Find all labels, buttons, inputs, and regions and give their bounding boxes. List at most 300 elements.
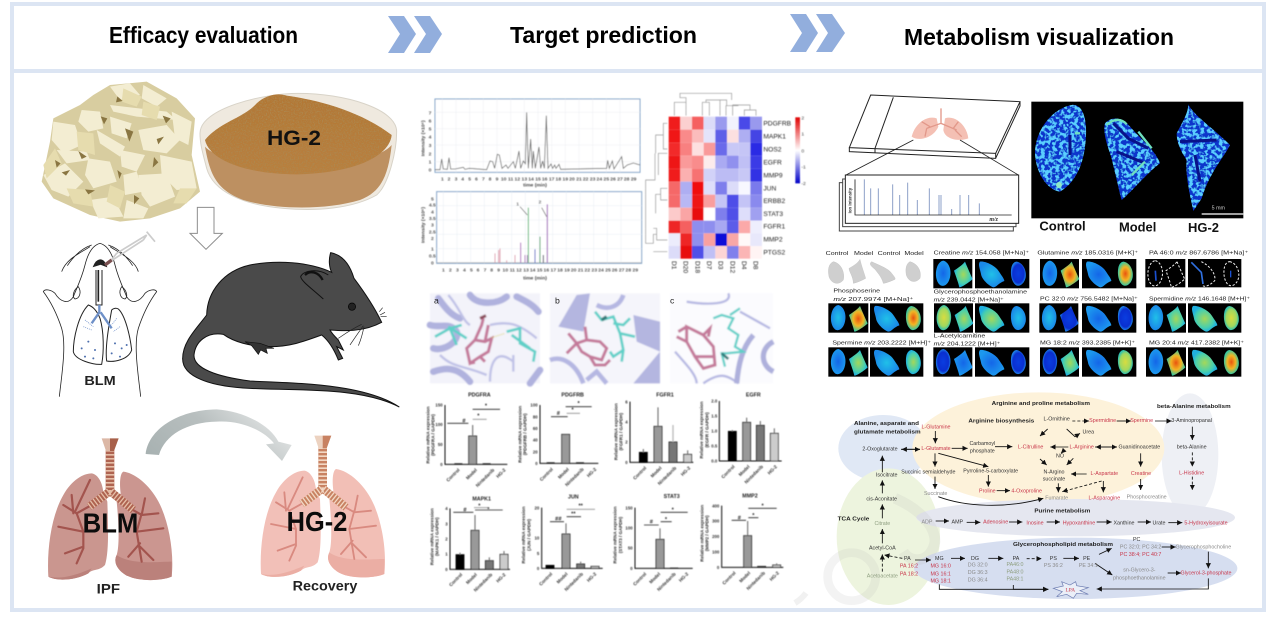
icon: fibrotic lungs (48, 438, 172, 580)
chart: total ion chromatogram: 2 (448, 176, 451, 182)
chart: FGFR1: HG-2 (680, 465, 692, 477)
chart: extracted ion chromatogram: 2 (449, 268, 452, 274)
chart: PDGFRB: (PDGFRB / GAPDH) (523, 413, 528, 455)
metabolites: arginine and proline: L-Arginine (1070, 445, 1094, 451)
chart: extracted ion chromatogram: 13 (523, 268, 529, 274)
chart: PDGFRA: 0 (440, 462, 443, 467)
chart: extracted ion chromatogram: 14 (530, 268, 536, 274)
image: ion images of lung sections: 5 mm (1212, 206, 1226, 212)
chart: FGFR1: 6 (625, 399, 628, 404)
heading: Metabolism visualization: Metabolism visualization (904, 24, 1174, 50)
chart: gene heatmap (646, 93, 806, 274)
metabolites: TCA and purine: Acetoacetate (867, 573, 898, 579)
heatmap gene labels: NOS2 (763, 146, 782, 153)
chart: EGFR (699, 392, 782, 485)
metabolites: TCA and purine: Urate (1152, 520, 1166, 526)
arrow: chevrons 2 (790, 14, 845, 52)
chart: MMP2: # (738, 516, 742, 522)
chart: FGFR1: 0 (625, 460, 628, 465)
chart: extracted ion chromatogram: 9 (497, 268, 500, 274)
callout: LPA starburst (1053, 582, 1088, 598)
chart: PDGFRA: # (462, 418, 466, 424)
docking c (670, 293, 773, 383)
chart: extracted ion chromatogram: 19 (564, 268, 570, 274)
chart: STAT3: (STAT3 / GAPDH) (618, 516, 623, 553)
chart: MAPK1: # (463, 508, 467, 514)
metabolites: arginine and proline: L-Glutamine (921, 424, 951, 430)
chart: extracted ion chromatogram: 20 (571, 268, 577, 274)
metabolites: glycerophospholipid: DG (971, 556, 979, 562)
chart: extracted ion chromatogram: 27 (619, 268, 625, 274)
metabolites: glycerophospholipid: Glycerol-3-phosphate (1181, 570, 1231, 576)
heatmap gene labels: FGFR1 (763, 224, 785, 231)
metabolites: arginine and proline: Phosphocreatine (1127, 495, 1167, 501)
metabolites: arginine and proline (862, 417, 1212, 501)
heading: TCA Cycle: TCA Cycle (838, 517, 869, 523)
chart: total ion chromatogram: Intensity (×10⁶) (420, 120, 426, 156)
optical tissue sections: Control (826, 251, 848, 257)
chart: FGFR1: Nintedanib (657, 465, 677, 486)
pathway zones (837, 392, 1237, 605)
chart: extracted ion chromatogram: 4 (431, 209, 434, 215)
chart: total ion chromatogram: 12 (515, 176, 520, 182)
heatmap gene labels: EGFR (763, 159, 782, 166)
chart: MMP2: MMP2 (742, 493, 758, 499)
chart: extracted ion chromatogram: 11 (510, 268, 515, 274)
chart: total ion chromatogram: 0 (429, 168, 432, 174)
ion image: Phosphoserine: m/z 207.9974 [M+Na]⁺ (833, 297, 914, 303)
watermark (795, 593, 806, 603)
metabolites: arginine and proline: 4-Oxoproline (1011, 488, 1042, 494)
chart: EGFR: Nintedanib (743, 464, 764, 485)
metabolites: glycerophospholipid: PA 18:2 (900, 571, 918, 577)
chart: extracted ion chromatogram: 0.5 (429, 254, 436, 260)
metabolites: glycerophospholipid: phosphoethanolamine (1113, 575, 1166, 581)
chart: PDGFRB: Relative mRNA expression (517, 406, 522, 463)
chart: total ion chromatogram: 20 (569, 176, 575, 182)
chart: extracted ion chromatogram: 24 (598, 268, 604, 274)
chart: extracted ion chromatogram: 12 (516, 268, 522, 274)
chart: STAT3: * (665, 517, 668, 523)
heatmap colour bar (795, 116, 806, 187)
chart: MAPK1: MAPK1 (472, 496, 491, 502)
chart: MAPK1: HG-2 (495, 572, 507, 584)
chart: total ion chromatogram: 14 (528, 176, 534, 182)
metabolites: glycerophospholipid: PE 34:1 (1079, 563, 1098, 569)
chart: STAT3: 100 (625, 525, 633, 530)
panel: qPCR bar charts (425, 392, 783, 593)
label: a: a (434, 296, 439, 306)
metabolites: glycerophospholipid: PA48:1 (1006, 577, 1024, 583)
chart: extracted ion chromatogram: 6 (477, 268, 480, 274)
chart: JUN: ** (571, 512, 576, 518)
chart: PDGFRA: Model (465, 468, 478, 481)
chart: MAPK1: (MAPK1 / GAPDH) (435, 517, 440, 556)
chart: MMP2: * (762, 504, 765, 510)
chart: STAT3: 50 (628, 546, 633, 551)
metabolites: arginine and proline: NO (1056, 454, 1064, 460)
heading: Alanine, asparate and glutamate metabolism: glutamate metabolism (854, 430, 921, 436)
chart: EGFR: Model (738, 464, 751, 477)
chart: JUN: (JUN / GAPDH) (526, 519, 531, 551)
chart: extracted ion chromatogram: 21 (578, 268, 584, 274)
metabolites: glycerophospholipid: MG (935, 556, 944, 562)
watermark rings (828, 498, 935, 601)
chart: extracted ion chromatogram: 3 (431, 223, 434, 229)
metabolites: glycerophospholipid: PA (1013, 556, 1020, 562)
metabolites: arginine and proline: Proline (979, 488, 996, 494)
panel: metabolic pathway map (828, 392, 1237, 605)
heading: Glycerophospholipid metabolism: Glycerophospholipid metabolism (1013, 542, 1113, 548)
metabolites: TCA and purine: Hypoxanthine (1063, 520, 1095, 526)
heatmap sample labels: D4 (740, 261, 747, 270)
icon: mouse anatomy with intratracheal instillation (43, 232, 157, 397)
optical tissue sections (826, 251, 924, 283)
heading: Arginine and proline metabolism: Arginine and proline metabolism (992, 401, 1090, 407)
chart: STAT3 (613, 494, 693, 592)
metabolites: arginine and proline: L-Asparagine (1088, 495, 1120, 501)
chart: PDGFRB: * (578, 401, 581, 407)
ion image: Spermine (828, 340, 931, 377)
chart: MAPK1: 3 (445, 521, 448, 526)
heatmap sample labels (670, 261, 759, 274)
docking b (550, 293, 660, 383)
chart: total ion chromatogram: 23 (590, 176, 596, 182)
optical tissue sections: Model (904, 251, 924, 257)
chart: extracted ion chromatogram: 28 (626, 268, 631, 274)
chart: JUN: JUN (568, 495, 579, 501)
chart: PDGFRA: 50 (438, 442, 443, 447)
chart: extracted ion chromatogram: 2.5 (429, 229, 436, 235)
chart: STAT3: STAT3 (664, 494, 680, 500)
heatmap colour bar: 2 (801, 116, 804, 122)
chart: total ion chromatogram (420, 99, 640, 188)
chart: extracted ion chromatogram: 0 (431, 261, 434, 267)
image: ion images of lung sections (1031, 102, 1243, 218)
chart: EGFR: HG-2 (767, 464, 778, 476)
chart: PDGFRA (425, 392, 507, 488)
chart: EGFR: 2.0 (711, 399, 718, 404)
metabolites: arginine and proline: 2-Oxoglutarate (862, 447, 898, 453)
metabolites: glycerophospholipid: PC (1133, 537, 1141, 543)
chart: FGFR1: Relative mRNA expression (613, 403, 618, 460)
chart: EGFR: 0.5 (711, 444, 718, 449)
chart: MAPK1: 4 (445, 506, 448, 511)
chart: MMP2: 200 (712, 534, 720, 539)
herb chips (42, 82, 200, 222)
metabolites: arginine and proline: phosphate (970, 449, 995, 455)
chart: MMP2: Model (738, 571, 751, 584)
chart: total ion chromatogram: 6 (429, 118, 432, 124)
chart: extracted ion chromatogram: 22 (585, 268, 590, 274)
chart: extracted ion chromatogram: 8 (490, 268, 493, 274)
chart: total ion chromatogram: 17 (549, 176, 555, 182)
metabolites: glycerophospholipid: MG 16:1 (930, 571, 951, 577)
chart: extracted ion chromatogram: time (min) (523, 276, 547, 282)
chart: PDGFRA: * (477, 414, 480, 420)
chart: total ion chromatogram: 9 (496, 176, 499, 182)
chart: STAT3: 150 (625, 505, 633, 510)
panel: MALDI imaging overview (839, 95, 1243, 235)
chart: STAT3: Model (648, 572, 661, 585)
chart: MMP2: Relative mRNA expression (699, 505, 704, 562)
icon: recovered lungs (261, 436, 385, 577)
ion image: Glycerophosphoethanolamine: m/z 239.0442 [M+Na]⁺ (934, 297, 1004, 303)
chart: total ion chromatogram: 8 (489, 176, 492, 182)
metabolites: arginine and proline: L-Ornithine (1043, 417, 1070, 423)
chart: STAT3: Relative mRNA expression (613, 506, 618, 563)
chart: PDGFRA: HG-2 (495, 467, 507, 479)
heatmap sample labels: D18 (693, 261, 700, 274)
chart: PDGFRA: PDGFRA (468, 392, 491, 398)
chart: STAT3: # (650, 520, 654, 526)
heatmap sample labels: D1 (670, 261, 677, 270)
chart: extracted ion chromatogram: 1 (516, 202, 519, 208)
chart: PDGFRB: Nintedanib (564, 467, 585, 487)
metabolites: glycerophospholipid: PS (1050, 556, 1057, 562)
metabolites: arginine and proline: L-Aspartate (1091, 471, 1118, 477)
chart: extracted ion chromatogram: 5 (431, 196, 434, 202)
chart: MAPK1: 1 (445, 552, 448, 557)
chart: PDGFRB (517, 392, 598, 487)
chart: MAPK1: Model (465, 572, 478, 585)
ion image: PA 46:0 (1145, 251, 1249, 287)
metabolites: glycerophospholipid: PA46:0 (1006, 562, 1024, 568)
heatmap gene labels: STAT3 (763, 211, 783, 218)
chart: total ion chromatogram: 3 (455, 176, 458, 182)
chart: extracted ion chromatogram: 2 (539, 200, 542, 206)
metabolites: arginine and proline: L-Glutamate (921, 446, 951, 452)
chart: MAPK1: Nintedanib (473, 572, 493, 593)
label: b: b (555, 296, 560, 306)
chart: MMP2: (MMP2 / GAPDH) (705, 515, 710, 551)
ion image: Phosphoserine (828, 288, 923, 333)
metabolites: glycerophospholipid: PS 36:2 (1044, 563, 1063, 569)
metabolites: arginine and proline: Isocitrate (876, 472, 898, 478)
heatmap gene labels: MMP2 (763, 237, 783, 244)
metabolites: TCA and purine: AMP (952, 520, 964, 526)
ion image: L-Acetylcarnitine: m/z 204.1222 [M+H]⁺ (934, 341, 1001, 347)
chart: extracted ion chromatogram: 4.5 (429, 203, 436, 209)
chart: extracted ion chromatogram: Intensity (×10⁶) (420, 207, 426, 243)
chart: PDGFRB: 80 (533, 414, 538, 419)
metabolites: arginine and proline: L-Histidine (1179, 470, 1204, 476)
metabolites: arginine and proline: Spermidine (1089, 418, 1116, 424)
metabolites: arginine and proline: Succinate (924, 491, 947, 497)
chart: total ion chromatogram: 7 (429, 110, 432, 116)
metabolites: glycerophospholipid: DG 32:0 (968, 562, 988, 568)
chart: MMP2: Nintedanib (745, 570, 766, 591)
chart: total ion chromatogram: 25 (604, 176, 609, 182)
ion image: Phosphoserine: Phosphoserine (833, 288, 880, 294)
metabolites: arginine and proline: beta-Alanine (1177, 445, 1207, 451)
chart: MMP2: 0 (717, 565, 720, 570)
chart: mass spectrum stack: m/z (989, 217, 999, 223)
chart: JUN: 10 (535, 536, 540, 541)
ion image: Creatine: Creatine m/z 154.058 [M+Na]⁺ (934, 251, 1029, 257)
chart: PDGFRA: * (485, 404, 488, 410)
chart: PDGFRB: Control (539, 467, 554, 482)
chart: total ion chromatogram: 3 (429, 143, 432, 149)
metabolites: TCA and purine (866, 497, 1228, 579)
arrow: chevrons 1 (388, 16, 442, 53)
metabolites: arginine and proline: L-Citrulline (1018, 445, 1043, 451)
heatmap colour bar: -2 (801, 181, 806, 187)
heatmap dendrograms (646, 93, 756, 252)
chart: PDGFRB: 60 (533, 426, 538, 431)
chart: extracted ion chromatogram: 23 (592, 268, 597, 274)
chart: EGFR: 0.0 (711, 459, 718, 464)
icon: black mouse (183, 253, 399, 407)
chart: total ion chromatogram: 27 (617, 176, 623, 182)
ion image: Spermidine: Spermidine m/z 146.1648 [M+H]⁺ (1149, 296, 1250, 302)
chart: PDGFRA: 150 (435, 403, 443, 408)
panel: efficacy evaluation top (42, 82, 399, 407)
chart: total ion chromatogram: 1 (441, 176, 444, 182)
chart: JUN: 0 (537, 566, 540, 571)
chart: STAT3: HG-2 (678, 571, 690, 583)
ion image: PC 32:0 (1039, 296, 1138, 333)
chart: PDGFRA: (PDGFRA / GAPDH) (431, 414, 436, 456)
metabolites: glycerophospholipid: DG 36:3 (968, 570, 988, 576)
chart: MAPK1: Control (448, 572, 463, 587)
heading: Alanine, asparate and glutamate metabolism (854, 421, 921, 436)
metabolites: glycerophospholipid: PA 16:2 (900, 564, 918, 570)
heatmap sample labels: D20 (682, 261, 689, 274)
chart: MMP2: Control (721, 571, 737, 586)
chart: PDGFRB: 100 (530, 403, 538, 408)
chart: EGFR: 1.0 (711, 429, 718, 434)
heatmap sample labels: D12 (728, 261, 735, 274)
heatmap sample labels: D7 (705, 261, 712, 270)
metabolites: arginine and proline: Carbamoyl (969, 441, 995, 447)
ion image: MG 18:2: MG 18:2 m/z 393.2385 [M+K]⁺ (1040, 340, 1135, 346)
docking a (430, 293, 540, 383)
ion image: Creatine (933, 251, 1029, 288)
chart: total ion chromatogram: 10 (501, 176, 507, 182)
chart: extracted ion chromatogram: 15 (537, 268, 543, 274)
metabolites: TCA and purine: Adenosine (983, 520, 1008, 526)
metabolites: TCA and purine: cis-Aconitate (866, 497, 897, 503)
chart: FGFR1: (FGFR1 / GAPDH) (619, 412, 624, 450)
heading: Alanine, asparate and glutamate metabolism: Alanine, asparate and (854, 421, 919, 427)
chart: PDGFRB: 40 (533, 438, 538, 443)
chart: FGFR1: Control (632, 466, 647, 481)
metabolites: glycerophospholipid: Glycerophosphocholine (1175, 544, 1231, 550)
chart: JUN: HG-2 (586, 571, 598, 583)
chart: MMP2: 400 (712, 503, 720, 508)
metabolites: TCA and purine: Citrate (874, 521, 890, 527)
heatmap gene labels: MMP9 (763, 172, 783, 179)
panel: molecular docking (430, 293, 773, 383)
chart: PDGFRB: * (572, 408, 575, 414)
chart: FGFR1: Model (650, 466, 663, 479)
ion image: PC 32:0: PC 32:0 m/z 756.5482 [M+Na]⁺ (1040, 296, 1138, 302)
metabolites: arginine and proline: 3-Aminopropanal (1171, 418, 1212, 424)
chart: total ion chromatogram: 4 (461, 176, 464, 182)
metabolites: glycerophospholipid: MG 16:0 (930, 564, 951, 570)
heatmap sample labels: D8 (752, 261, 759, 270)
chart: total ion chromatogram: 5 (468, 176, 471, 182)
chart: MAPK1: 0 (445, 567, 448, 572)
heatmap gene labels: PDGFRB (763, 120, 792, 127)
metabolites: TCA and purine: Inosine (1026, 520, 1044, 526)
chart: total ion chromatogram: 4 (429, 135, 432, 141)
syringe (105, 232, 155, 265)
chart: JUN: 5 (537, 551, 540, 556)
chart: extracted ion chromatogram: 2 (431, 236, 434, 242)
heading: Target prediction: Target prediction (510, 22, 697, 48)
ion image: MG 20:4: MG 20:4 m/z 417.2382 [M+K]⁺ (1149, 340, 1244, 346)
metabolites: glycerophospholipid: PC 38:4; PC 40:7 (1120, 552, 1161, 558)
heatmap gene labels: MAPK1 (763, 133, 786, 140)
chart: PDGFRA: Nintedanib (475, 467, 495, 488)
ion image: PA 46:0: PA 46:0 m/z 867.6786 [M+Na]⁺ (1149, 251, 1249, 257)
chart: STAT3: * (672, 508, 675, 514)
metabolites: arginine and proline: Guanidinoacetate (1118, 445, 1160, 451)
chart: MMP2 (699, 493, 783, 591)
heatmap colour bar: -1 (801, 164, 806, 170)
optical tissue sections: Control (878, 251, 900, 257)
chart: extracted ion chromatogram: 5 (470, 268, 473, 274)
chart: PDGFRB: # (557, 411, 561, 417)
metabolites: TCA and purine: ADP (922, 520, 933, 526)
heading: beta-Alanine metabolism: beta-Alanine metabolism (1157, 404, 1231, 410)
label: HG-2: HG-2 (1188, 221, 1219, 235)
heatmap gene labels: PTGS2 (763, 250, 785, 257)
chart: total ion chromatogram: 6 (475, 176, 478, 182)
chart: FGFR1 (613, 392, 693, 486)
metabolites: glycerophospholipid: PE (1083, 556, 1091, 562)
label: Control: Control (1039, 220, 1086, 234)
metabolites: arginine and proline: succinate (1043, 476, 1065, 482)
metabolites: glycerophospholipid: MG 18:1 (930, 579, 951, 585)
chart: PDGFRA: Control (445, 468, 461, 483)
chart: total ion chromatogram: 26 (610, 176, 616, 182)
metabolites: TCA and purine: 5-Hydroxyisourate (1184, 521, 1228, 527)
metabolites: arginine and proline: Creatine (1131, 471, 1151, 477)
chart: PDGFRA: 100 (435, 422, 443, 427)
heatmap colour bar: 0 (801, 148, 804, 154)
chart: extracted ion chromatogram: 10 (503, 268, 508, 274)
label: IPF: IPF (97, 580, 120, 596)
metabolites: glycerophospholipid: PA48:0 (1006, 570, 1024, 576)
ion image: MG 20:4 (1146, 340, 1244, 377)
chart: JUN: Control (538, 572, 553, 587)
chart: total ion chromatogram: 24 (597, 176, 602, 182)
chart: total ion chromatogram: 29 (631, 176, 637, 182)
metabolites: glycerophospholipid: DG 36:4 (968, 577, 988, 583)
ion image: L-Acetylcarnitine (933, 333, 1029, 377)
chart: extracted ion chromatogram: 4 (463, 268, 466, 274)
heading: Arginine biosynthesis: Arginine biosynthesis (968, 419, 1034, 425)
chart: extracted ion chromatogram: 25 (605, 268, 611, 274)
metabolites: TCA and purine: Xanthine (1113, 520, 1135, 526)
chart: JUN: Nintedanib (563, 571, 584, 592)
chart: total ion chromatogram: 1 (429, 160, 432, 166)
chart: extracted ion chromatogram: 1 (442, 268, 445, 274)
chart: total ion chromatogram: 2 (429, 151, 432, 157)
chart: extracted ion chromatogram (420, 192, 642, 282)
chart: extracted ion chromatogram: 16 (544, 268, 549, 274)
chart: total ion chromatogram: 15 (535, 176, 541, 182)
chart: extracted ion chromatogram: 26 (612, 268, 618, 274)
arrow: BLM to HG-2 curve (146, 409, 292, 461)
chart: JUN (521, 495, 603, 592)
chart: mass spectrum stack: Ion Intensity (848, 187, 853, 213)
chart: STAT3: Control (632, 572, 647, 587)
chart: JUN: Relative mRNA expression (521, 506, 526, 563)
